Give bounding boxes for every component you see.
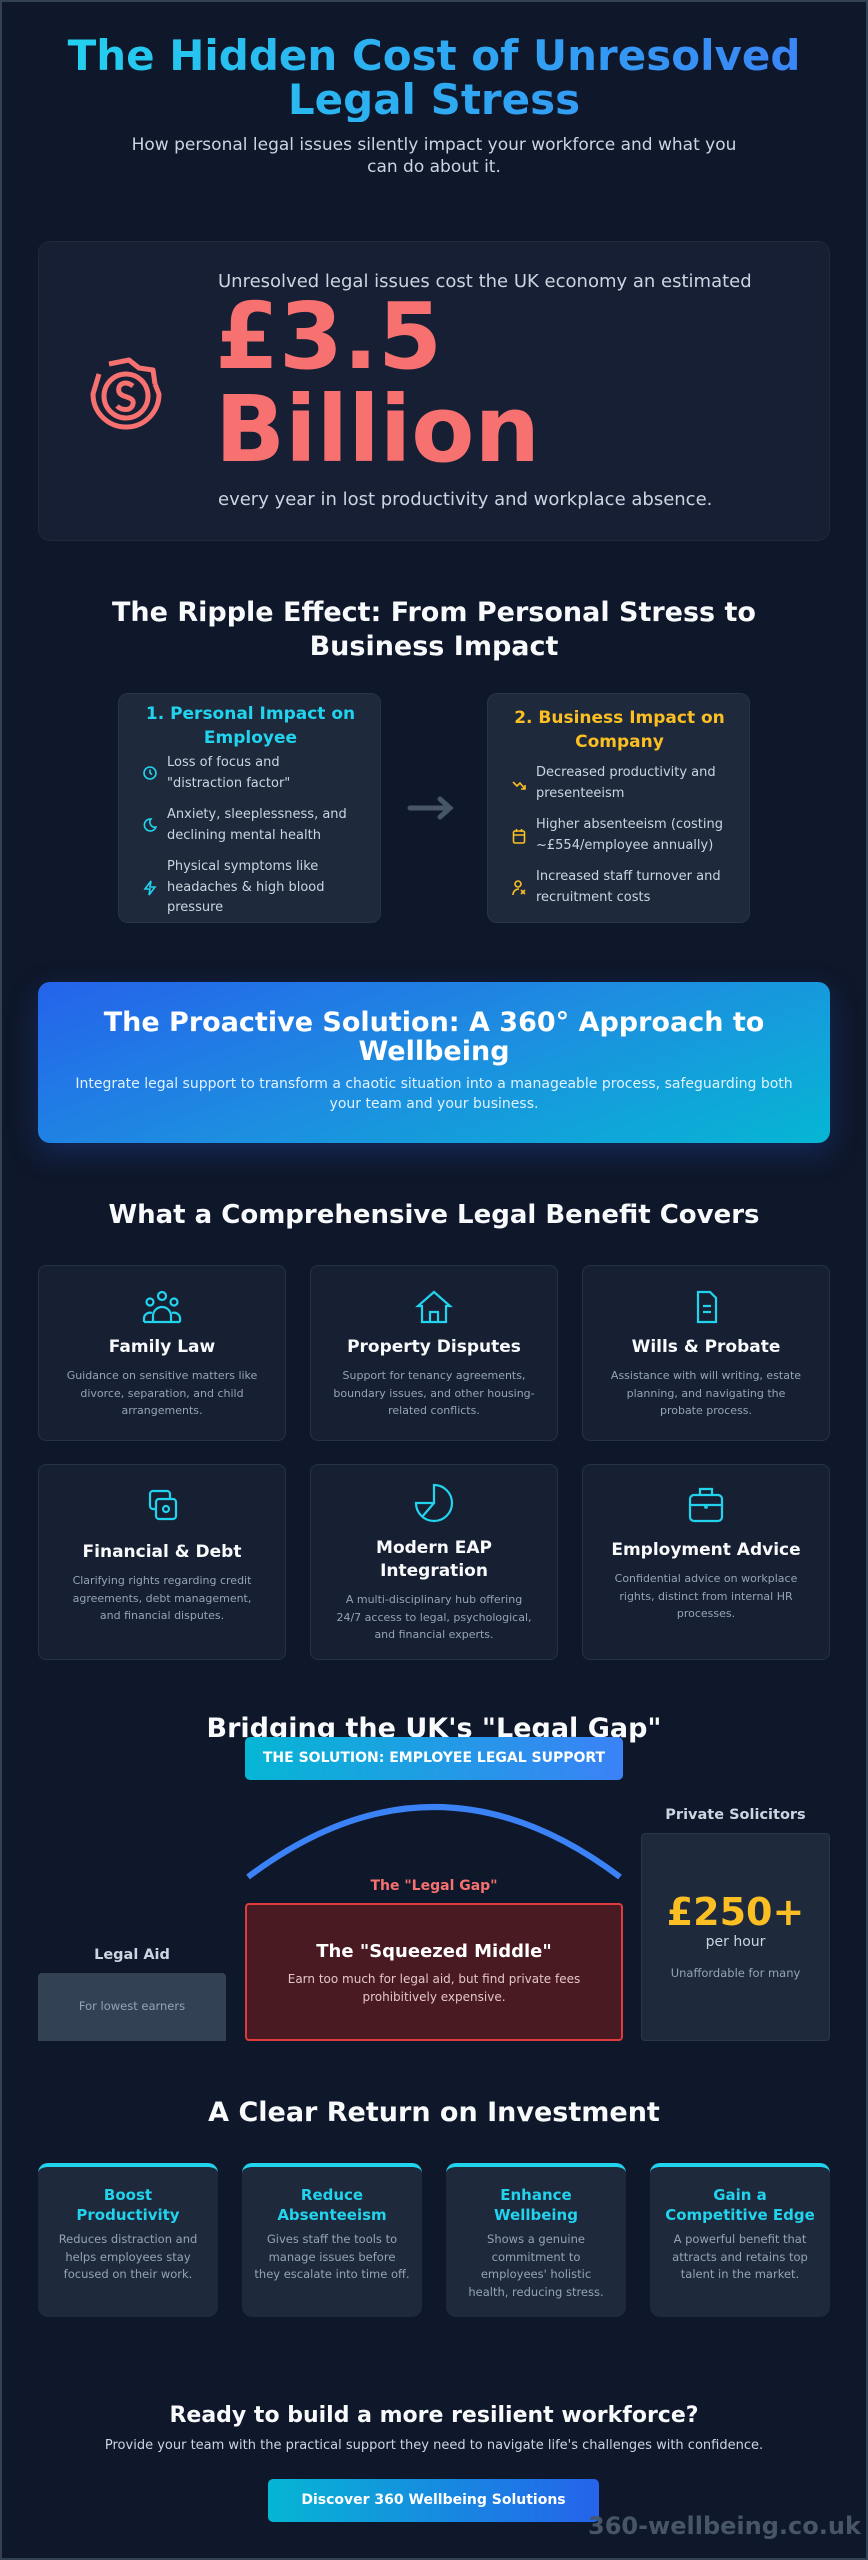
box: private solicitors: per hour bbox=[706, 1934, 765, 1950]
arc bridge bbox=[246, 1804, 622, 1880]
panel: proactive solution banner: Integrate legal support to transform a chaotic situation into a manageable process, safeguarding both your team and your business. bbox=[75, 1076, 793, 1112]
panel: proactive solution banner: The Proactive Solution: A 360° Approach to Wellbeing bbox=[104, 1007, 764, 1067]
CTA button: Discover 360 Wellbeing Solutions bbox=[301, 2492, 566, 2508]
card: wellbeing: Shows a genuine commitment to employees' holistic health, reducing stress. bbox=[468, 2232, 604, 2298]
card: productivity: Boost bbox=[104, 2186, 152, 2204]
card: wills: Assistance with will writing, estate planning, and navigating the probate process. bbox=[611, 1369, 801, 1417]
card: financial: Clarifying rights regarding credit agreements, debt management, and financial disputes. bbox=[73, 1574, 251, 1622]
panel: personal impact bbox=[118, 693, 381, 923]
card: wellbeing: Enhance bbox=[500, 2186, 572, 2204]
card: absenteeism: Absenteeism bbox=[277, 2206, 387, 2224]
diagram: legal gap: Private Solicitors bbox=[665, 1807, 806, 1823]
box: squeezed middle: Earn too much for legal aid, but find private fees prohibitively expensive. bbox=[288, 1972, 580, 2004]
card: EAP bbox=[310, 1464, 558, 1660]
card: competitive edge: Gain a bbox=[713, 2186, 767, 2204]
stat intro text: Unresolved legal issues cost the UK economy an estimated bbox=[218, 271, 752, 292]
card: productivity: Reduces distraction and helps employees stay focused on their work. bbox=[59, 2232, 197, 2281]
big number bbox=[215, 283, 540, 483]
card: competitive edge bbox=[650, 2163, 830, 2317]
card: absenteeism: Reduce bbox=[301, 2186, 363, 2204]
card: property: Support for tenancy agreements, boundary issues, and other housing-related conflicts. bbox=[333, 1369, 535, 1417]
panel: personal impact: 1. Personal Impact on Employee bbox=[146, 704, 355, 748]
panel: business impact bbox=[487, 693, 750, 923]
card: employment: Confidential advice on workplace rights, distinct from internal HR processes. bbox=[615, 1572, 797, 1620]
card: family law: Family Law bbox=[109, 1337, 215, 1357]
card: EAP: Modern EAP Integration bbox=[376, 1538, 492, 1581]
box: squeezed middle bbox=[245, 1903, 623, 2041]
CTA button bbox=[268, 2479, 599, 2522]
card: family law: Guidance on sensitive matters like divorce, separation, and child arrangements. bbox=[67, 1369, 257, 1417]
box: legal aid bbox=[38, 1947, 226, 2041]
item: anxiety: Anxiety, sleeplessness, and declining mental health bbox=[167, 807, 347, 842]
heading: covers: What a Comprehensive Legal Benefit Covers bbox=[108, 1200, 760, 1230]
card: absenteeism bbox=[242, 2163, 422, 2317]
big number: £3.5 bbox=[215, 283, 442, 390]
card: wills bbox=[582, 1265, 830, 1441]
heading: ripple effect: The Ripple Effect: From Personal Stress to Business Impact bbox=[112, 597, 756, 662]
box: legal aid: Legal Aid bbox=[94, 1947, 170, 1963]
card: wills: Wills & Probate bbox=[632, 1337, 780, 1357]
CTA text: Provide your team with the practical support they need to navigate life's challenges with confidence. bbox=[105, 2438, 763, 2453]
CTA heading: Ready to build a more resilient workforce? bbox=[169, 2403, 699, 2428]
item: productivity: Decreased productivity and presenteeism bbox=[536, 765, 716, 800]
box: private solicitors bbox=[641, 1807, 830, 2041]
big number: Billion bbox=[215, 376, 540, 483]
box: private solicitors: Unaffordable for many bbox=[671, 1966, 800, 1980]
card: family law bbox=[38, 1265, 286, 1441]
heading: legal gap: Bridging the UK's "Legal Gap" bbox=[206, 1713, 662, 1744]
box: squeezed middle: The "Squeezed Middle" bbox=[316, 1941, 552, 1962]
card: employment: Employment Advice bbox=[611, 1540, 801, 1560]
card: wellbeing bbox=[446, 2163, 626, 2317]
item: physical: Physical symptoms like headaches & high blood pressure bbox=[167, 859, 324, 915]
card: employment bbox=[582, 1464, 830, 1660]
stat outro text: every year in lost productivity and workplace absence. bbox=[218, 489, 712, 510]
card: financial bbox=[38, 1464, 286, 1660]
box: private solicitors: £250+ bbox=[667, 1890, 804, 1934]
box: legal aid: For lowest earners bbox=[79, 1999, 185, 2013]
diagram: legal gap bbox=[38, 1737, 830, 2041]
card: EAP: A multi-disciplinary hub offering 24/7 access to legal, psychological, and financial experts. bbox=[336, 1593, 532, 1641]
panel: proactive solution banner bbox=[38, 982, 830, 1143]
watermark: 360-wellbeing.co.uk bbox=[588, 2512, 861, 2540]
label: legal gap: The "Legal Gap" bbox=[370, 1878, 498, 1894]
label: solution bbox=[245, 1737, 623, 1780]
label: solution: THE SOLUTION: EMPLOYEE LEGAL SUPPORT bbox=[263, 1750, 605, 1766]
panel: headline statistic bbox=[38, 241, 830, 541]
card: financial: Financial & Debt bbox=[83, 1542, 241, 1562]
card: competitive edge: Competitive Edge bbox=[665, 2206, 815, 2224]
arrow bbox=[408, 796, 454, 820]
card: competitive edge: A powerful benefit that attracts and retains top talent in the market. bbox=[672, 2232, 808, 2281]
card: productivity: Productivity bbox=[76, 2206, 180, 2224]
panel: business impact: 2. Business Impact on Company bbox=[514, 708, 725, 752]
title: The Hidden Cost of Unresolved Legal Stress bbox=[68, 31, 800, 124]
card: absenteeism: Gives staff the tools to manage issues before they escalate into time off. bbox=[254, 2232, 410, 2281]
card: property bbox=[310, 1265, 558, 1441]
icon: money cycle bbox=[90, 358, 162, 430]
item: absenteeism: Higher absenteeism (costing ~£554/employee annually) bbox=[536, 817, 723, 852]
card: productivity bbox=[38, 2163, 218, 2317]
card: wellbeing: Wellbeing bbox=[494, 2206, 578, 2224]
item: focus: Loss of focus and "distraction factor" bbox=[167, 755, 290, 790]
card: property: Property Disputes bbox=[347, 1337, 521, 1357]
heading: ROI: A Clear Return on Investment bbox=[208, 2097, 660, 2128]
item: turnover: Increased staff turnover and recruitment costs bbox=[536, 869, 721, 904]
subtitle: How personal legal issues silently impact your workforce and what you can do about it. bbox=[132, 135, 736, 177]
